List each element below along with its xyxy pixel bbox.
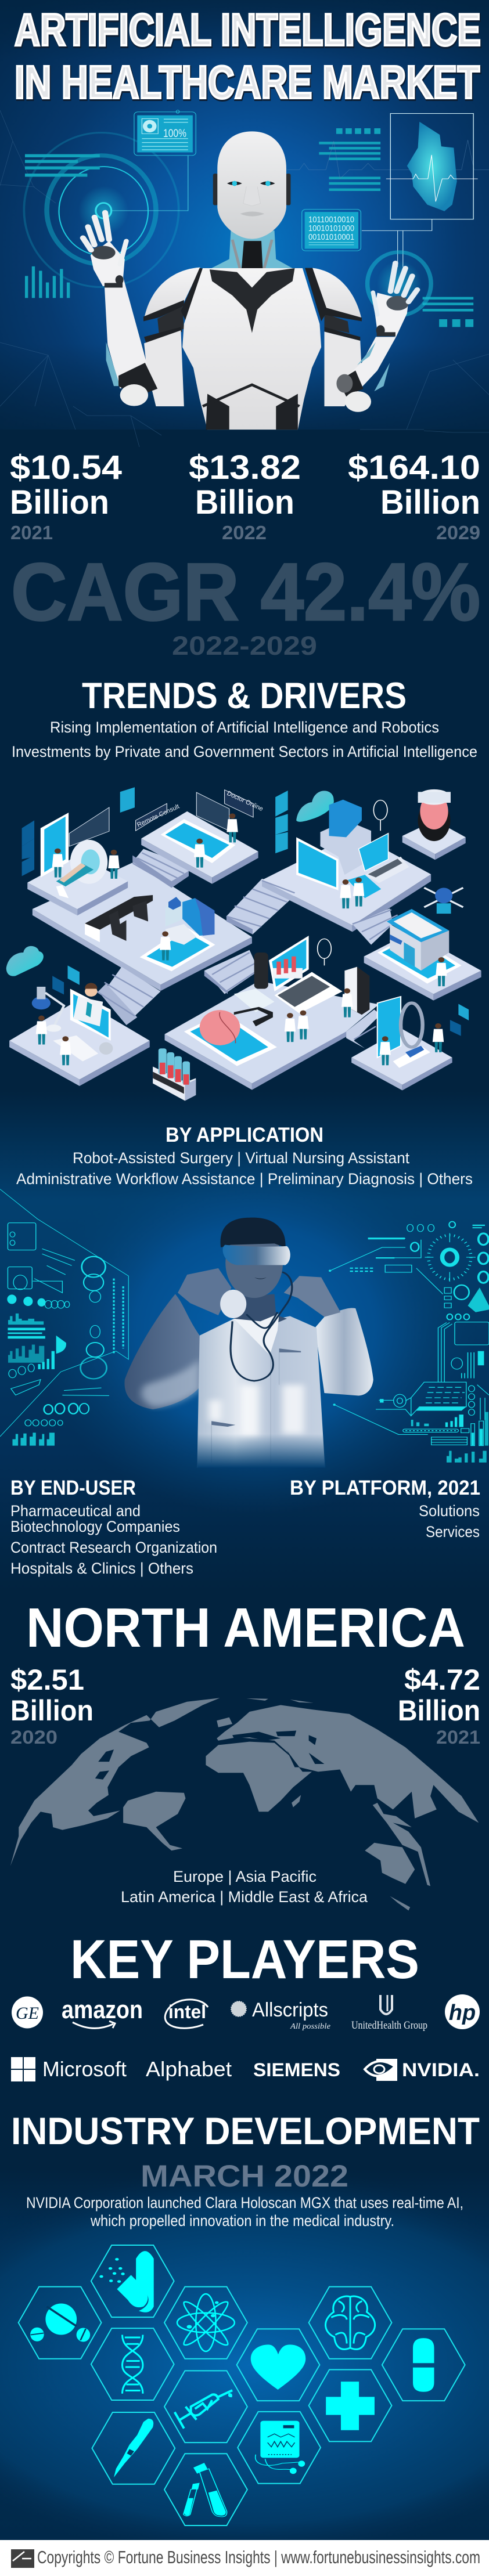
doctor online label: Doctor Online — [226, 790, 264, 813]
logo: SIEMENS: SIEMENS — [253, 2059, 340, 2080]
icon: syringe — [175, 2390, 232, 2429]
logo: Allscripts: Allscripts — [252, 1999, 328, 2021]
left HUD — [0, 1189, 128, 1437]
heading: by end-user: BY END-USER — [10, 1477, 136, 1499]
binary readout text: 00101010001 — [308, 232, 354, 242]
icon: heart — [251, 2344, 305, 2390]
stat: 2029: Billion — [380, 484, 480, 521]
footer logo — [11, 2549, 34, 2568]
doctor figure — [124, 1218, 373, 1468]
binary readout text: 10010101000 — [308, 223, 354, 233]
key player logos — [11, 1994, 480, 2081]
other regions: Europe | Asia Pacific — [173, 1868, 317, 1885]
stat: NA 2021: Billion — [398, 1694, 480, 1727]
robot — [83, 131, 418, 430]
world map — [10, 1698, 479, 1911]
stat: 2029: 2029 — [436, 522, 480, 543]
CAGR: CAGR 42.4% — [11, 546, 480, 637]
stat: 2021: $10.54 — [10, 449, 122, 486]
logo: HP — [445, 1994, 480, 2029]
HUD graphics (zoom-space group) — [24, 110, 489, 430]
heading: by application: BY APPLICATION — [166, 1124, 323, 1146]
platform list — [419, 1502, 480, 1540]
icon: DNA — [123, 2335, 143, 2394]
100 percent label: 100% — [163, 128, 186, 140]
end-user list — [10, 1502, 217, 1577]
end-user list: Hospitals & Clinics | Others — [10, 1560, 193, 1577]
logo: HP: hp — [449, 2001, 476, 2025]
stat: 2021: 2021 — [10, 522, 53, 543]
stat: 2022: $13.82 — [189, 449, 301, 486]
isometric healthcare illustration — [6, 787, 481, 1101]
end-user list: Biotechnology Companies — [10, 1518, 180, 1535]
icon: thermometer — [114, 2419, 153, 2477]
other regions: Latin America | Middle East & Africa — [121, 1888, 368, 1906]
application list — [16, 1149, 473, 1188]
icon: test tubes — [184, 2463, 227, 2517]
footer bar — [0, 2540, 489, 2576]
stat: NA 2021: $4.72 — [404, 1664, 480, 1696]
panel: doctor with HUD — [0, 1189, 489, 1468]
logo: Alphabet: Alphabet — [146, 2057, 232, 2081]
logo: UnitedHealth Group: UnitedHealth Group — [351, 2019, 427, 2032]
logo: Allscripts: All possible — [290, 2022, 330, 2031]
stat: NA 2020: 2020 — [10, 1727, 57, 1748]
stat: NA 2020 — [10, 1664, 94, 1748]
development text — [26, 2194, 463, 2229]
stat: 2029 — [348, 449, 480, 543]
heading: north america: NORTH AMERICA — [26, 1597, 465, 1659]
application list: Administrative Workflow Assistance | Preliminary Diagnosis | Others — [16, 1170, 473, 1188]
100% panel — [134, 110, 196, 156]
end-user list: Pharmaceutical and — [10, 1502, 141, 1520]
logo: amazon: amazon — [62, 1996, 143, 2024]
trends list — [12, 719, 477, 760]
stat: 2021 — [10, 449, 122, 543]
floating icons and clouds — [6, 787, 469, 1036]
heading: by platform: BY PLATFORM, 2021 — [290, 1477, 480, 1499]
application list: Robot-Assisted Surgery | Virtual Nursing Assistant — [73, 1149, 409, 1167]
stat: NA 2020: $2.51 — [10, 1664, 84, 1696]
icon: brain — [326, 2296, 375, 2349]
icon: ECG monitor — [256, 2421, 305, 2474]
end-user list: Contract Research Organization — [10, 1539, 217, 1556]
icon: cross — [326, 2382, 375, 2430]
stair treads — [96, 853, 398, 1040]
icon: capsule — [413, 2338, 434, 2392]
date: March 2022: MARCH 2022 — [141, 2159, 348, 2193]
heading: key players: KEY PLAYERS — [70, 1929, 419, 1990]
stat: 2021: Billion — [10, 484, 109, 521]
doctor section background — [0, 1091, 489, 1590]
stat: 2022 — [189, 449, 301, 543]
right HUD — [330, 1221, 489, 1446]
stat: NA 2020: Billion — [10, 1694, 94, 1727]
trends list: Rising Implementation of Artificial Intelligence and Robotics — [50, 719, 439, 736]
devices, phones and equipment — [32, 789, 462, 1101]
platforms — [9, 811, 481, 1091]
heading: trends and drivers: TRENDS & DRIVERS — [82, 676, 407, 716]
icon: capsule powder — [99, 2251, 154, 2312]
development text: which propelled innovation in the medical industry. — [90, 2212, 394, 2229]
stat: NA 2021: 2021 — [436, 1727, 480, 1748]
remote consult label: Remote Consult — [136, 803, 181, 829]
icon: pills — [30, 2303, 90, 2342]
CAGR period: 2022-2029 — [172, 631, 317, 661]
panel: hero robot — [0, 0, 489, 447]
medical hexagon icons — [19, 2245, 465, 2526]
logo: intel: intel — [168, 2001, 206, 2022]
title — [15, 4, 481, 109]
people — [36, 813, 447, 1065]
stat: NA 2021 — [398, 1664, 480, 1748]
hexagon section background — [0, 2168, 489, 2563]
binary readout text — [308, 215, 354, 242]
logo: UnitedHealth Group — [351, 1995, 427, 2032]
platform list: Solutions — [419, 1502, 480, 1520]
hexagon outlines — [19, 2245, 465, 2526]
stat: 2022: 2022 — [222, 522, 267, 543]
logo: Allscripts — [231, 1999, 330, 2031]
platform list: Services — [426, 1523, 480, 1540]
logo: NVIDIA: NVIDIA. — [402, 2059, 480, 2080]
stat: 2029: $164.10 — [348, 449, 480, 486]
logo: Microsoft: Microsoft — [42, 2057, 127, 2081]
logo: intel — [165, 2000, 208, 2028]
heart box — [362, 114, 478, 267]
stat: 2022: Billion — [195, 484, 294, 521]
icon: atom — [177, 2294, 235, 2351]
logo: NVIDIA — [365, 2059, 480, 2081]
binary readout text: 10110010010 — [308, 215, 354, 225]
logo: GE — [12, 1997, 43, 2028]
binary panel — [302, 210, 361, 251]
other regions — [121, 1868, 368, 1906]
logo: GE: GE — [16, 2004, 39, 2023]
